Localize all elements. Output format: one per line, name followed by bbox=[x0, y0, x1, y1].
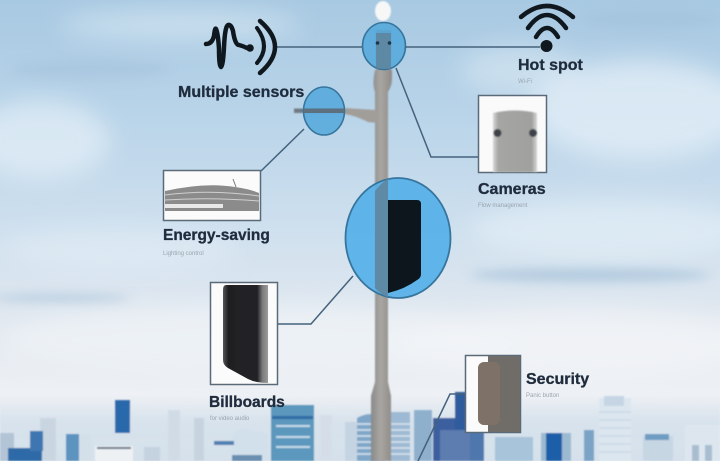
line: camera circle to camera photo bbox=[396, 68, 479, 157]
icon: multiple sensors pulse bbox=[206, 21, 275, 73]
icon: wifi bbox=[521, 6, 573, 52]
line: circle to wifi bbox=[405, 46, 540, 48]
label: billboards: Billboards bbox=[209, 394, 285, 411]
label: cameras bbox=[478, 181, 546, 209]
label: energy-saving bbox=[163, 227, 270, 257]
line: billboard circle to billboard photo bbox=[278, 276, 353, 324]
label: hot spot: Hot spot bbox=[518, 57, 584, 74]
label: security bbox=[526, 371, 589, 399]
label: security: Security bbox=[526, 371, 589, 388]
label: energy-saving: Lighting control bbox=[163, 251, 204, 257]
label: billboards bbox=[209, 394, 285, 422]
label: cameras: Cameras bbox=[478, 181, 546, 198]
label: energy-saving: Energy-saving bbox=[163, 227, 270, 244]
city skyline bbox=[0, 392, 720, 461]
callout: billboard circle bbox=[346, 178, 450, 298]
photo: camera bbox=[478, 96, 546, 172]
line: sensors to camera circle bbox=[276, 46, 362, 48]
photo: security bbox=[466, 356, 520, 432]
photo: billboard bbox=[210, 282, 278, 384]
label: hot spot bbox=[518, 57, 584, 85]
callout: energy-saving lamp circle bbox=[304, 87, 344, 135]
label: security: Panic button bbox=[526, 393, 559, 399]
label: cameras: Flow management bbox=[478, 203, 528, 209]
line: security photo to pole base bbox=[418, 394, 465, 461]
line: lamp circle to energy-saving photo bbox=[261, 129, 304, 171]
lamp pole bbox=[294, 1, 392, 461]
label: hot spot: Wi-Fi bbox=[518, 79, 532, 85]
label: multiple sensors: Multiple sensors bbox=[178, 84, 304, 101]
callout: camera circle bbox=[362, 22, 406, 70]
connector lines bbox=[261, 47, 540, 461]
label: billboards: for video audio bbox=[210, 416, 250, 422]
photo: energy-saving lamp bbox=[164, 170, 260, 220]
